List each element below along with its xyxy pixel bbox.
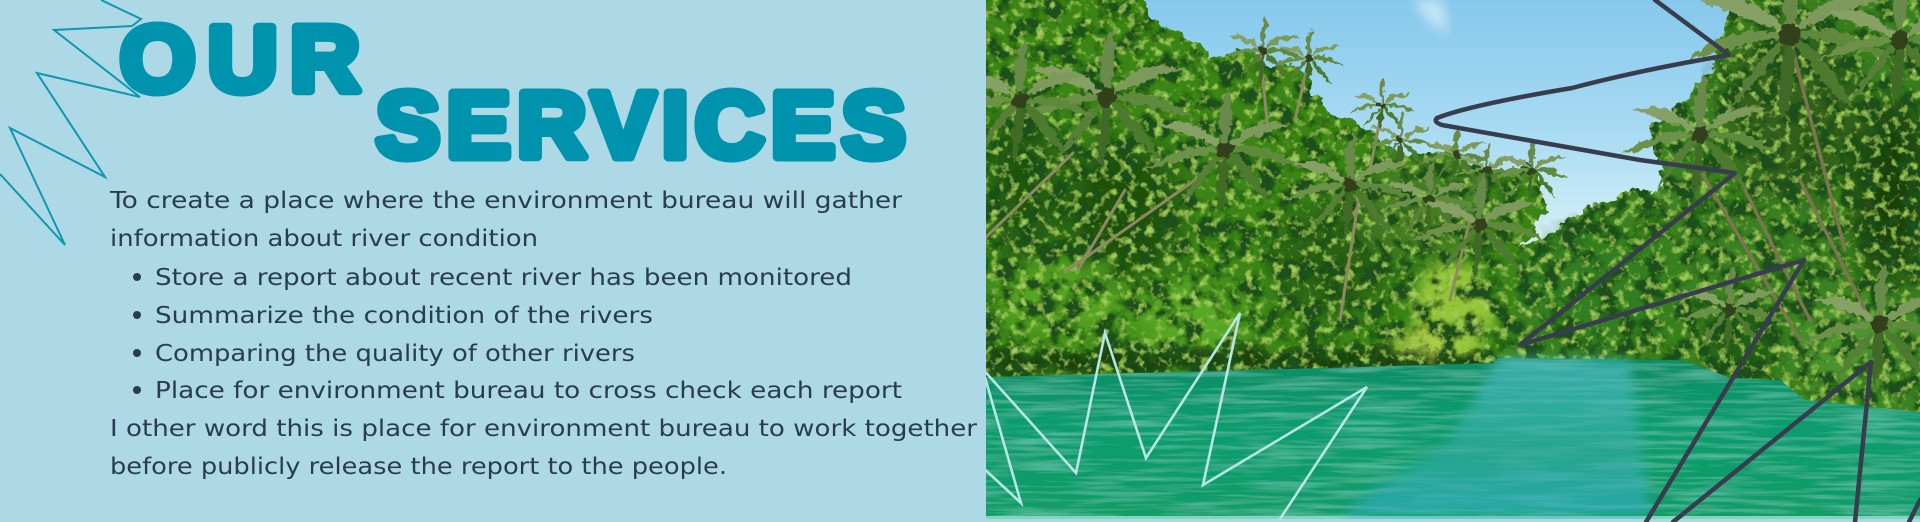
palm crowns (942, 0, 1920, 389)
decorative teal zigzag (0, 0, 141, 245)
text block: description: I other word this is place for environment bureau to work together (110, 416, 978, 442)
sky (1144, 0, 1739, 246)
dark zigzag stroke (1436, 0, 1920, 522)
bottom water edge (986, 516, 1920, 519)
bullet list: Store a report about recent river has been monitored (155, 265, 852, 291)
title: our services: SERVICES (376, 74, 912, 178)
title: our services: OUR (120, 8, 372, 112)
text block: description: To create a place where the environment bureau will gather (109, 188, 903, 214)
title: our services (120, 8, 912, 178)
light zigzag on water (980, 313, 1367, 522)
panel: river photo (942, 0, 1920, 522)
text block: description (109, 188, 978, 480)
palm trunks (986, 40, 1870, 340)
central reflection (1340, 358, 1650, 516)
bullet list (133, 265, 902, 404)
text block: description: before publicly release the report to the people. (110, 454, 727, 480)
text block: description: information about river condition (110, 226, 538, 252)
bullet list: Comparing the quality of other rivers (155, 341, 635, 367)
cloud (1412, 0, 1448, 35)
bullet list: Summarize the condition of the rivers (155, 303, 653, 329)
foliage on both banks (976, 0, 1920, 425)
bullet list: Place for environment bureau to cross check each report (155, 378, 902, 404)
river water (986, 358, 1920, 516)
